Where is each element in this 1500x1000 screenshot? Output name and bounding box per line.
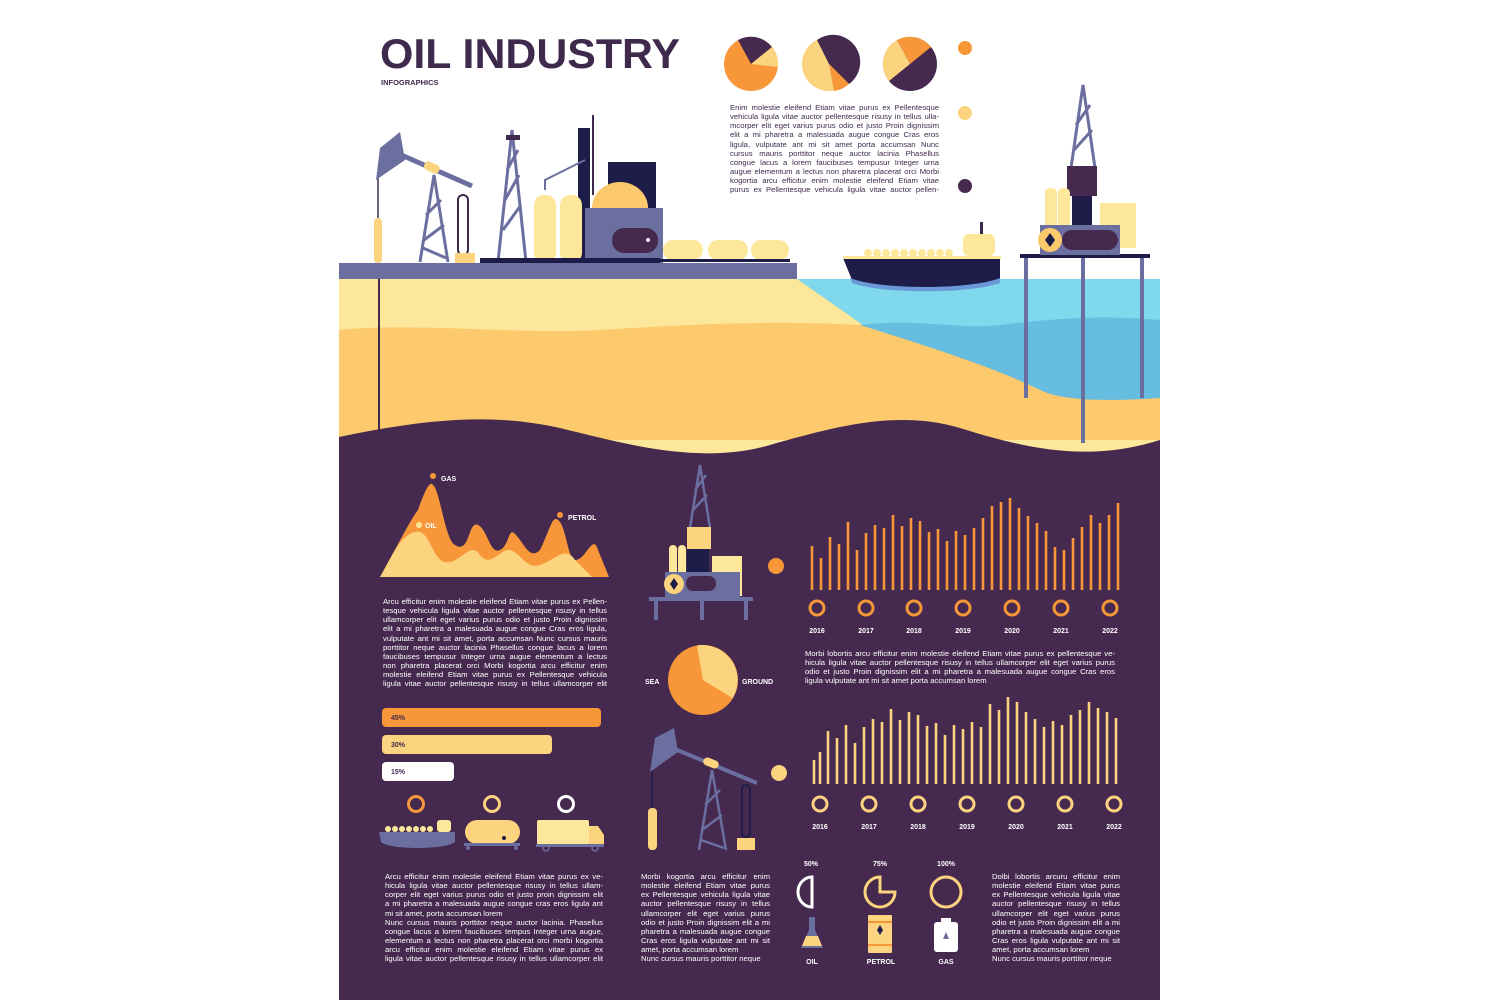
text: bottom right paragraph: Dolbi lobortis arcuru efficitur enim: [992, 872, 1120, 881]
transport rings: [408, 796, 574, 812]
text: area chart paragraph: tesque vehicula ligula vitae auctor pellentesque risusy in tellus: [383, 606, 607, 615]
ground platform: [339, 263, 797, 444]
icon: tank car: [464, 820, 520, 850]
text: bottom left paragraph: [385, 872, 603, 963]
text: bottom left paragraph: mi sit amet, porta accumsan lorem: [385, 909, 502, 918]
text: bottom center paragraph: odio et justo Proin dignissim elit a mi: [641, 918, 770, 927]
text: area chart paragraph: elit a mi pharetra a malesuada augue congue Cras eros ligula,: [383, 624, 607, 633]
text: bar chart paragraph: ligula vulputate ant mi sit amet porta accumsan lorem: [805, 676, 987, 685]
year rings 1: 2018: [906, 628, 922, 635]
text: area chart paragraph: ullamcorper elit eget varius purus odio et justo Proin dignissim: [383, 615, 607, 624]
year rings 2: 2017: [861, 824, 877, 831]
text: top paragraph: vehicula ligula vitae auctor pellentesque risusy in tellus ulla-: [730, 112, 939, 121]
text: bottom right paragraph: odio et justo Proin dignissim elit a mi: [992, 918, 1120, 927]
year rings 1: 2020: [1004, 628, 1020, 635]
icon: refinery: [480, 115, 663, 263]
text: top paragraph: mcorper elit eget varius purus odio et justo Proin dignissim: [730, 121, 939, 130]
text: bottom left paragraph: Nunc cursus mauris porttitor neque auctor lacinia. Phasellus: [385, 918, 603, 927]
text: area chart paragraph: [383, 597, 607, 688]
text: bottom left paragraph: elementum a lectus non pharetra placerat orci morbi kogortia: [385, 936, 603, 945]
area chart: PETROL: [568, 515, 597, 522]
year rings 1: 2016: [809, 628, 825, 635]
year rings 2: 2018: [910, 824, 926, 831]
text: bottom right paragraph: auctor pellentesque risusy in tellus: [992, 899, 1120, 908]
icon: offshore rig center: [649, 465, 753, 620]
text: bottom right paragraph: [992, 872, 1120, 963]
text: top paragraph: Enim molestie eleifend Etiam vitae purus ex Pellentesque: [730, 103, 939, 112]
title: OIL INDUSTRY: [380, 30, 680, 77]
text: area chart paragraph: Arcu efficitur enim molestie eleifend Etiam vitae purus ex Pellen-: [383, 597, 607, 606]
year rings 1: 2021: [1053, 628, 1069, 635]
icon: tanker ship top: [843, 222, 1001, 291]
year rings 2: 2020: [1008, 824, 1024, 831]
year rings 2: [812, 797, 1122, 831]
text: bar chart paragraph: Morbi lobortis arcu efficitur enim molestie eleifend Etiam vitae purus ex pellentesque ve-: [805, 649, 1115, 658]
text: bottom center paragraph: [641, 872, 770, 963]
text: top paragraph: augue elementum a lectus non pharetra placerat orci Morbi: [730, 167, 939, 176]
text: bottom center paragraph: molestie eleifend Etiam vitae purus: [641, 881, 770, 890]
percent icons oil petrol gas: OIL: [806, 959, 819, 966]
progress bars: 45%: [391, 715, 406, 722]
background landscape: [339, 279, 1160, 1000]
icon: derrick top: [498, 130, 526, 262]
text: area chart paragraph: non pharetra placerat orci Morbi kogortia arcu efficitur enim: [383, 661, 607, 670]
text: bar chart paragraph: [805, 649, 1115, 685]
text: area chart paragraph: ligula vitae auctor pellentesque risusy in tellus ullamcorper elit: [383, 679, 607, 688]
progress bars: 15%: [391, 769, 406, 776]
area chart: [380, 473, 609, 577]
progress bars: [382, 708, 601, 781]
text: bottom right paragraph: ullamcorper elit eget varius purus: [992, 909, 1120, 918]
legend dots: [958, 41, 972, 193]
icon: pump jack center: [648, 728, 757, 850]
text: area chart paragraph: molestie eleifend Etiam vitae purus ex Pellentesque vehicula: [383, 670, 607, 679]
percent icons oil petrol gas: [798, 861, 961, 966]
bar chart 2016-2022 orange: [812, 498, 1118, 590]
percent icons oil petrol gas: PETROL: [867, 959, 896, 966]
dots center: [768, 558, 787, 781]
text: bottom center paragraph: ex Pellentesque vehicula ligula vitae: [641, 890, 770, 899]
text: bottom left paragraph: corper elit eget varius purus odio et justo proin dignissim elit: [385, 890, 603, 899]
icon: truck: [536, 820, 604, 851]
pie: sea ground: [645, 640, 773, 715]
year rings 1: 2019: [955, 628, 971, 635]
year rings 2: 2022: [1106, 824, 1122, 831]
percent icons oil petrol gas: 75%: [873, 861, 888, 868]
icon: pump jack top: [374, 132, 475, 263]
text: top paragraph: congue lacus a lorem faucibuses tempusur Integer urna: [730, 158, 939, 167]
percent icons oil petrol gas: 50%: [804, 861, 819, 868]
text: bottom left paragraph: ligula vitae auctor pellentesque risusy in tellus ullamcorper elit: [385, 954, 603, 963]
text: area chart paragraph: porttitor neque auctor lacinia Phasellus congue lacus a lorem: [383, 643, 607, 652]
area chart: OIL: [425, 523, 437, 530]
year rings 1: 2022: [1102, 628, 1118, 635]
text: top paragraph: cursus mauris porttitor neque auctor lacinia Phasellus: [730, 149, 939, 158]
pie: sea ground: GROUND: [742, 679, 773, 686]
text: bottom right paragraph: amet, porta accumsan lorem: [992, 945, 1089, 954]
text: top paragraph: ligula, vulputate ant mi sit amet porta accumsan Nunc: [730, 140, 939, 149]
text: top paragraph: [730, 103, 939, 194]
pie: sea ground: SEA: [645, 679, 659, 686]
text: area chart paragraph: faucibuses tempusur Integer urna augue elementum a lectus: [383, 652, 607, 661]
text: area chart paragraph: vulputate ant mi sit amet, porta accumsan Nunc cursus mauris: [383, 634, 607, 643]
text: bottom center paragraph: ullamcorper elit eget varius purus: [641, 909, 770, 918]
area chart: GAS: [441, 476, 456, 483]
icon: offshore platform top: [1020, 85, 1150, 443]
text: bar chart paragraph: hicula ligula vitae auctor pellentesque risusy in tellus ullamcorper elit eget varius purus: [805, 658, 1115, 667]
bar chart 2016-2022 yellow: [814, 697, 1116, 784]
year rings 1: 2017: [858, 628, 874, 635]
text: bottom center paragraph: Nunc cursus mauris porttitor neque: [641, 954, 761, 963]
icon: tank wagons: [660, 240, 790, 262]
text: bottom left paragraph: arcu efficitur enim molestie eleifend Etiam vitae purus ex: [385, 945, 603, 954]
text: bottom left paragraph: congue lacus a lorem faucibuses tempus Integer urna augue,: [385, 927, 603, 936]
percent icons oil petrol gas: GAS: [938, 959, 954, 966]
text: bottom right paragraph: Nunc cursus mauris porttitor neque: [992, 954, 1112, 963]
year rings 2: 2019: [959, 824, 975, 831]
text: top paragraph: kogortia arcu efficitur enim molestie eleifend Etiam vitae: [730, 176, 939, 185]
text: bottom center paragraph: Morbi kogortia arcu efficitur enim: [641, 872, 770, 881]
text: bottom right paragraph: Cras eros ligula vulputate ant mi sit: [992, 936, 1120, 945]
text: bottom center paragraph: auctor pellentesque risusy in tellus: [641, 899, 770, 908]
title: INFOGRAPHICS: [381, 78, 439, 87]
icon: ship small: [379, 820, 455, 848]
text: bar chart paragraph: odio et justo Proin dignissim elit a mi pharetra a malesuada augue congue Cras eros: [805, 667, 1115, 676]
percent icons oil petrol gas: 100%: [937, 861, 956, 868]
text: bottom left paragraph: a mi pharetra a malesuada augue congue cras eros ligula ant: [385, 899, 603, 908]
text: bottom right paragraph: ex Pellentesque vehicula ligula vitae: [992, 890, 1120, 899]
text: bottom center paragraph: amet, porta accumsan lorem: [641, 945, 738, 954]
year rings 2: 2021: [1057, 824, 1073, 831]
text: bottom center paragraph: Cras eros ligula vulputate ant mi sit: [641, 936, 770, 945]
text: top paragraph: elit a mi pharetra a malesuada augue congue Cras eros: [730, 130, 939, 139]
text: top paragraph: purus ex Pellentesque vehicula ligula vitae auctor pellen-: [730, 185, 939, 194]
progress bars: 30%: [391, 742, 406, 749]
text: bottom right paragraph: pharetra a malesuada augue congue: [992, 927, 1120, 936]
text: bottom right paragraph: molestie eleifend Etiam vitae purus: [992, 881, 1120, 890]
text: bottom left paragraph: Arcu efficitur enim molestie eleifend Etiam vitae purus ex ve-: [385, 872, 603, 881]
pie charts top: [724, 35, 937, 91]
year rings 1: [809, 601, 1118, 635]
text: bottom left paragraph: hicula ligula vitae auctor pellentesque risusy in tellus ullam-: [385, 881, 603, 890]
year rings 2: 2016: [812, 824, 828, 831]
text: bottom center paragraph: pharetra a malesuada augue congue: [641, 927, 770, 936]
